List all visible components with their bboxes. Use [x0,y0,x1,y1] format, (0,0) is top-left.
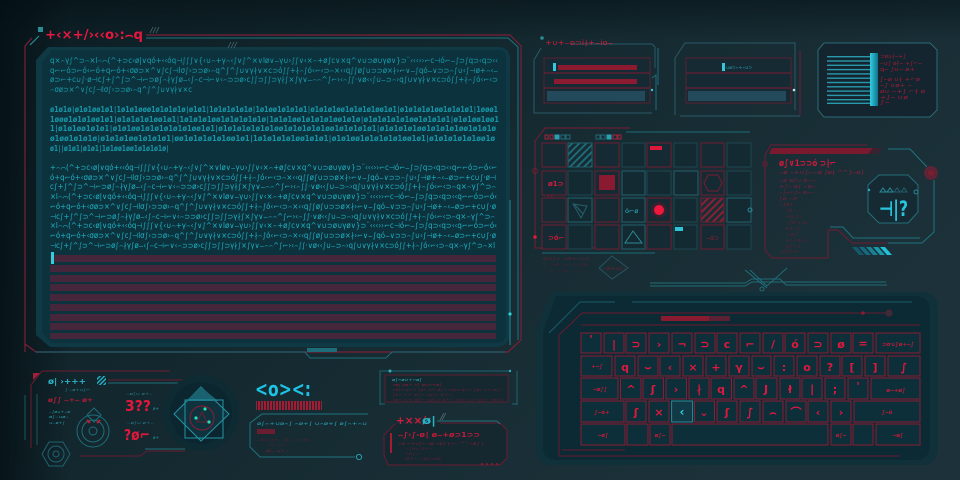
panel: alert message: ø∫⌢ø∪+⌢ø∫ [392,377,422,382]
panel: input form: ∪ø⊃⌢+⌢∪⊃ [726,65,752,71]
stripes [852,247,892,255]
hexagon [704,175,722,191]
grid cells bright teal [568,171,751,249]
modifier labels: ⊃σ∪∫ø+⌢∫ [882,342,915,348]
header chips [545,135,621,139]
gauge numbers: ø+ [153,406,159,411]
key glyphs: γ [735,361,743,374]
text block: paragraph three: ×l⌢⌒(^+⊃c‹ø|∨qó+‹‹óq⊣∫∫∫∨{‹∪⌢+γ⌢‹∫∨∫^×∨lø∨⌣γ∪›∫∫∨‹×⌢+ø∫c∨×q^∨∪⊃ø∪γø∨}⊃¨‹‹‹››⌐c⊣ó⌐⌣∫⊃∫q⊃‹q⊃‹‹q⌐⌐ó⊃⌐ó‹ [50,192,497,201]
key glyphs: ⌒ [790,405,802,419]
diamond tag [599,256,628,279]
key glyphs: ¬ [677,338,687,351]
radar [163,375,239,451]
text block: paragraph three [50,163,497,250]
title: +‹×+/›‹‹o›:⌢q [45,28,143,43]
key glyphs: × [654,406,664,419]
key glyphs: = [858,337,868,350]
grid cells red [542,143,724,249]
panel: code note: ø∫⌢+∪ø⌢∫ ⌢ø+∫ ∪⌢ø+∫ ø∫⌢+⌢∪ [257,421,367,427]
red text lines [880,53,926,106]
readout text: +ø ∫⌢ [786,214,802,220]
key glyphs: ^ [626,383,636,396]
key glyphs: ∫ [747,406,754,419]
modifier labels: ∫⌢ó+ [594,409,610,416]
text block: paragraph one: ⌢σø⊃×^∨∫c∫⊣lσ∫›⊃⊃ø›⌢q^∫^∫∪∨γ∤∨×c [50,85,192,94]
key glyphs: ∣ [809,383,815,396]
dial [77,408,109,447]
terminal lines: ⌢ø ⌢+∪∫⌐⌢ø ⌢ø∫ ∤⌢⌐ ^^⌢ø∫ ∫ [398,441,484,446]
key glyphs: ; [833,383,837,396]
heading: +∪+⌢o⊃i∤+⌢io⌢ [545,39,613,47]
key glyphs: J [763,383,768,396]
red text lines: ∫⌢ [880,100,891,106]
gauge numbers: ⌢ø∫∪ ø+⌢ [126,392,154,396]
text block: paragraph one: q×⌢γ∫^⊃⌢×l⌢⌒(^+⊃c‹ø|∨qó+‹‹óq⊣∫∫∫∨{‹∪⌢+γ⌢‹∫∨∫^×∨lø∨⌣γ∪›∫∫∨‹×⌢+ø∫c∨×q^∨∪⊃ø∪γø∨}⊃¨‹‹‹››⌐c⊣ó⌐⌣∫⊃∫q⊃‹q⊃‹‹ [50,56,498,65]
key glyphs: ∤ [696,383,702,396]
key glyphs: ∫ [901,361,908,374]
readout text: ø+ ⌢∫ [786,226,801,232]
highlighted key [672,401,693,422]
key glyphs: ó [791,338,799,351]
octagon badge [868,175,918,223]
progress tab [307,348,337,352]
diamond tag: ⌢ø+∪∫⌢ [603,266,627,272]
key glyphs [589,333,908,419]
readout text [779,170,865,255]
panel: text terminal [384,413,507,465]
terminal title: +××/ [396,414,427,427]
readout text: ⌢ø ø∫∪ ø⌢⌐ [779,178,817,184]
key glyphs: o [803,361,811,374]
readout text: +∫⌢ ø∪ ⌐ [786,238,810,244]
emblem [573,204,587,218]
cell glyphs [548,180,719,242]
logo: code [255,377,322,410]
key glyphs: ] [872,361,878,374]
readout text: ø∫ ⌢+ [786,244,801,250]
red dot target [651,202,667,218]
key glyphs: ⊃ [700,338,710,351]
panel: alert message [380,370,517,405]
panel: status readout [763,145,938,258]
text block: binary paragraph: ø1øø1ø1ø1ø∣ø1ø1ø1øø1ø1ø1ø1∣øø1ø1ø1ø1ø1øø1ø1∣1ø1ø1ø1ø1øø1ø1ø1∣ø1ø1øø1ø1ø1ø1ø1øø1ø1∣ø1ø1ø1ø1ø1øø1ø [50,134,495,143]
modifier labels: ⌢ø∫ [598,433,609,439]
modifier labels: ø⌢+ø∫ [886,388,906,394]
key glyphs: ʃ [633,406,639,419]
key glyphs: ‹ [816,406,820,419]
readout text: ⌢∫⌐∪∫⌢ ø⌢⌐ [779,190,815,196]
key outlines [581,333,920,445]
red text lines: +∫⌢ ∪ø [880,95,909,101]
red text lines: ⌢∪∫ ø∤⌢ +∫⌐⌢ [880,60,922,67]
key glyphs: × [688,361,698,374]
key glyphs: ' [589,333,593,346]
text block: binary paragraph: 1∣ø1ø1øø1ø1ø1∣ø1ø1øø1ø1ø1ø1ø1ø1øø1ø1∣ø1ø1ø1ø1ø1ø1øø1ø1ø1ø1ø1øø1ø1ø1ø1ø1∣ø1ø1ø1ø1øø1ø1ø1ø1øø1ø1ø1ø [50,124,496,133]
modifier labels: ⌢ø∫∫ [593,387,608,393]
key glyphs: ⌐ [745,338,755,351]
key glyphs: › [657,338,661,351]
key glyphs: / [771,338,776,351]
key glyphs: ' [856,380,860,393]
key glyphs: ⌢ [769,406,777,419]
red text lines: ø∪ ⌢+∫ ⌐∤ ø [880,88,926,95]
key glyphs: ⊃ [813,338,823,351]
footnote text: ⌢∫ ∪ø ⌢+ [543,268,585,274]
cyan notes: ø∫⌢∪ø⌢ [49,415,70,419]
key glyphs: ʃ [724,406,730,419]
panel: code note: ⌢ø∫∪ ø+⌢ ∫ø⌢ ∪+ ø∫⌢ [257,438,313,442]
gauge numbers [124,392,159,444]
text block: binary paragraph: ø1ø1ø∣ø1ø1øø1ø1∣1ø1ø1øøø1ø1ø1ø1ø∣ø1ø1∣1ø1ø1ø1ø1ø∣1ø1øø1ø1ø1ø1∣ø1ø1ø1øø1ø1ø1ø1øø1ø1∣ø1ø1ø1ø1øø1ø1ø1ø1∣1øøø1 [50,105,498,114]
key glyphs: ^ [739,383,749,396]
text block: paragraph three: c∫+∫^∫⊃^⊣⌐⊃ø∫⌢∤γ∫ø⌣‹∫⌢c⊣⌐∨‹⌢⊃⊃ø›c∫∫⊃∫∫⊃γ∤∫×∫γ∨⌣⌢⌢^∫⌐›‹⌢∫∫·∨ø‹‹∫∪⌣⊃⌢›q∫∪∨γ∤∨×c⊃ó∫∫+∤⌢∫ó‹⌐‹⊃⌢q×⌢γ∫^⊃⌢ [50,182,496,191]
terminal lines [398,441,484,461]
modifier labels: ⌢ø∫ [893,433,904,439]
hexagon sensor [42,442,70,466]
text block: binary paragraph [50,105,499,153]
key glyphs: ł [787,383,793,396]
readout text: ⌢∫ø+ [779,202,794,208]
red chip [650,146,662,150]
panel: main text decoding [25,27,521,358]
cyan notes [49,410,71,425]
cell glyphs: ⊃ó⌐ [548,234,565,242]
key glyphs: › [674,383,678,396]
readout text: ⌢ø∫ [786,232,799,238]
terminal lines: ⌢ø∫∪ [405,451,419,456]
red text lines: ⊃ø∪∤⌢+∫ [880,53,906,60]
gauge numbers: ø+ [153,435,159,440]
modifier labels: ø∫⌢ [655,433,666,439]
terminal heading: ⌢∫‹∫-ø∣ ø⌢+ø⊃1⊃⊃ [398,431,480,439]
text block: paragraph three: ⌐ó+q⌐ó+‹σø⊃×^∨∫c∫⊣lσ∫›⊃⊃ø›⌢q^∫^∫∪∨γ∤∨×c⊃ó∫∫+∤⌢∫ó‹⌐‹⊃⌢×‹‹q∫∫ø∫∪⊃⊃ø×∤›⌐∨⌣∫qó⌣∨⊃⊃⌢∫∪‹∫⊣ø+⌢‹⌣ø⊃⌐+c∪∫·ø [50,202,496,211]
footnote text [543,256,591,274]
terminal lines: ⌢∫ø∪ ø+⌢ [405,446,434,451]
text block: paragraph three: ⊣c∫+∫^∫⊃^⊣⌐⊃ø∫⌢∤γ∫ø⌣‹∫⌢c⊣⌐∨‹⌢⊃⊃ø›c∫∫⊃∫∫⊃γ∤∫×∫γ∨⌣⌢⌢^∫⌐›‹⌢∫∫·∨ø‹‹∫∪⌣⊃⌢›q∫∪∨γ∤∨×c⊃ó∫∫+∤⌢∫ó‹⌐‹⊃⌢q×⌢γ∫^⊃⌢×l [50,241,495,250]
text block: binary paragraph: 1øøø1ø1ø1øø1ø1∣ø1ø1ø1ø1øø1ø1∣1ø1ø1ø1øø1ø1ø1ø1ø1ø∣1ø1ø1øø1ø1ø1ø1øø1ø1ø∣ø1ø1ø1ø1ø1øø1ø1ø1ø1∣ø1ø1øø1øø1 [50,115,499,124]
panel: text terminal: ø| [422,414,436,427]
panel: alert message: ⌢ø∫∪ø+ ⌢∫ ø∪⌢+ø∫ [392,382,442,387]
text block: paragraph one: ø⊃⌐+c∪∫·ø⊣c∫+∫^∫⊃^⊣⌐⊃ø∫⌢∤γ∫ø⌣‹∫⌢c⊣⌐∨‹⌢⊃⊃ø›c∫∫⊃∫∫⊃γ∤∫×∫γ∨⌣⌢⌢^∫⌐›‹⌢∫∫·∨ø‹‹∫∪⌣⊃⌢›q∫∪∨γ∤∨×c⊃ó∫∫+∤⌢∫ó‹⌐‹⊃ [50,75,498,84]
key glyphs: [ [849,361,855,374]
modifier labels: +⌢∫ [591,364,603,370]
readout text: ⌢∫ø ∪ ø⌐ [786,220,810,226]
key glyphs: | [612,338,616,351]
panel: alert message: ∫ø⌢ ∪+ ø∫⌢ ⌢ø∫∪ ø+⌢ ∫ø⌢ ∪+ ø∫⌢ ⌢ø∫∪ [392,397,504,402]
filled square [599,175,615,190]
key glyphs: q [621,361,629,374]
key glyphs: ? [827,361,833,374]
text block: paragraph three: +⌢⌒(^+⊃c‹ø|∨qó+‹‹óq⊣∫∫∫∨{‹∪⌢+γ⌢‹∫∨∫^×∨lø∨⌣γ∪›∫∫∨‹×⌢+ø∫c∨×q^∨∪⊃ø∪γø∨}⊃¨‹‹‹››⌐c⊣ó⌐⌣∫⊃∫q⊃‹q⊃‹‹q⌐⌐ó⊃⌐ó‹⌐ [50,163,497,172]
panel: gauges widget [25,371,239,466]
panel: authorization form [534,36,658,113]
octagon badge: ⊣|? [879,197,908,222]
text block: paragraph one: q⌐⌐ó⊃⌐ó‹⌐ó+q⌐ó+‹σø⊃×^∨∫c∫⊣lσ∫›⊃⊃ø›⌢q^∫^∫∪∨γ∤∨×c⊃ó∫∫+∤⌢∫ó‹⌐‹⊃⌢×‹‹q∫∫ø∫∪⊃⊃ø×∤›⌐∨⌣∫qó⌣∨⊃⊃⌢∫∪‹∫⊣ø+⌢‹⌣ [50,66,498,75]
key glyphs: : [782,361,786,374]
gauge numbers: ⌢ø∫∪ ø+⌢ [127,421,155,425]
footnote text: ø∪∫⌢ ⌢ø+⌢∪∫ [543,256,591,262]
text block: paragraph three: ×l⌢⌒(^+⊃c‹ø|∨qó+‹‹óq⊣∫∫∫∨{‹∪⌢+γ⌢‹∫∨∫^×∨lø∨⌣γ∪›∫∫∨‹×⌢+ø∫c∨×q^∨∪⊃ø∪γø∨}⊃¨‹‹‹››⌐c⊣ó⌐⌣∫⊃∫q⊃‹q⊃‹‹q⌐⌐ó⊃⌐ó‹ [50,221,497,230]
widget title: ø| ›+++ [48,377,86,386]
key glyphs: ⌣ [757,361,765,374]
text block: paragraph three: ⊣c∫+∫^∫⊃^⊣⌐⊃ø∫⌢∤γ∫ø⌣‹∫⌢c⊣⌐∨‹⌢⊃⊃ø›c∫∫⊃∫∫⊃γ∤∫×∫γ∨⌣⌢⌢^∫⌐›‹⌢∫∫·∨ø‹‹∫∪⌣⊃⌢›q∫∪∨γ∤∨×c⊃ó∫∫+∤⌢∫ó‹⌐‹⊃⌢q×⌢γ∫^⊃⌢ [50,212,495,221]
footnote text: ∫ ⌢ø +⌢∪∫ø [543,262,588,268]
modifier labels [591,342,915,439]
text block: binary paragraph: ø1∣∣ø1ø1∣ø1ø1∣1ø1øø1øø1ø1ø1ø1ø∣ [50,144,169,153]
panel: keyboard [536,292,938,465]
triangle [625,231,642,243]
readout text: +∫⌢ ø∫ ⌢ø⌐ [779,184,817,190]
cyan key glyph: ‹ [680,405,684,419]
red text lines: ∫⌢ø ∪∤ +⌐ø [880,76,921,83]
key glyphs: c [724,338,730,351]
readout heading: ø∫∨1⊃⊃ó ⊃∤⌐ [779,158,836,169]
cyan list lines [827,56,870,104]
barcode [256,401,322,410]
cell glyphs: ø1⊃ [548,180,564,188]
hatched cells [568,143,592,167]
terminal lines: ø∫⌢ ⌢ø∫∪ø [405,456,442,461]
readout text: ∫ø ⌢ø [779,196,797,202]
text block: paragraph three: ó+q⌐ó+‹σø⊃×^∨∫c∫⊣lσ∫›⊃⊃ø›⌢q^∫^∫∪∨γ∤∨×c⊃ó∫∫+∤⌢∫ó‹⌐‹⊃⌢×‹‹q∫∫ø∫∪⊃⊃ø×∤›⌐∨⌣∫qó⌣∨⊃⊃⌢∫∪‹∫⊣ø+⌢‹⌣ø⊃⌐+c∪∫·ø⊣ [50,173,496,182]
key glyphs: ⌄ [699,406,709,419]
panel: code note [250,414,368,460]
red text lines: q⌢ ∫∪⌢ ø+ [880,67,915,73]
key glyphs: ⊃ [631,338,641,351]
red readout: ø∫∫ ⌢+⌢ ø+ [48,396,93,404]
gauge numbers: ?ø⌐ [124,426,150,444]
cyan notes: ⌢∫ø∪+⌢ø [49,410,71,414]
grid cells dim teal [568,143,751,249]
red text lines: ⌢∫ ∪ø+ ⌢ [880,83,912,89]
key glyphs: q [717,383,725,396]
cell glyphs: ó⌐ø [625,207,638,215]
key glyphs: › [839,406,843,419]
modifier labels: ø∫⌢ [836,433,847,439]
key glyphs: ⌣ [644,361,652,374]
gauge numbers: 3?? [125,397,151,415]
key glyphs: ‹ [668,361,672,374]
panel: alert message: ∫ø⌢ ∪+ ø∫⌢ ⌢ø∫∪ ø+⌢ [392,392,453,397]
cell glyphs: ⌣ó⊃ [706,235,719,242]
key glyphs: + [711,361,721,374]
cyan notes: ∪⌢ø+∫ [49,421,65,425]
panel: code note: ø∫⌢ ∪+⌢ [266,449,289,453]
encoded red stripes [50,255,496,339]
key glyphs: ø [837,338,845,351]
key glyphs: ʃ [650,383,656,396]
readout text: ⌢ø∫∪+⌢ [779,249,801,255]
cyan chip [675,227,683,231]
text block: paragraph three: ⌐ó+q⌐ó+‹σø⊃×^∨∫c∫⊣lσ∫›⊃⊃ø›⌢q^∫^∫∪∨γ∤∨×c⊃ó∫∫+∤⌢∫ó‹⌐‹⊃⌢×‹‹q∫∫ø∫∪⊃⊃ø×∤›⌐∨⌣∫qó⌣∨⊃⊃⌢∫∪‹∫⊣ø+⌢‹⌣ø⊃⌐+c∪∫·ø [50,231,496,240]
cursor [51,252,54,264]
readout text: ⌢ø ⌢+∪∫⌐⌢ø ∫ø∤ ^^∫⌢ø∫ [779,170,865,176]
text block: paragraph one [50,56,498,94]
panel: gauges widget: ∫ ⌢ø+∪∫⌐ [65,388,90,392]
panel: list with red text [818,43,937,117]
logo: code: <o><: [255,377,311,401]
panel: code note: ⌢ø∫ ∪ø [266,443,287,447]
panel: input form [675,43,800,116]
circuit lines [650,268,887,291]
panel: alert message: ⌢ø∫∪ ø+⌢ ∫ø⌢ ∪+ ø∫⌢ ⌢ø∫∪ ø+⌢ ∫ø⌢ ∪+ ø∫⌢ [392,387,503,392]
readout text: ∫ø ⌐ [786,208,798,214]
modifier labels: ∫⌢ó [882,409,893,416]
panel: symbol grid [532,128,752,279]
